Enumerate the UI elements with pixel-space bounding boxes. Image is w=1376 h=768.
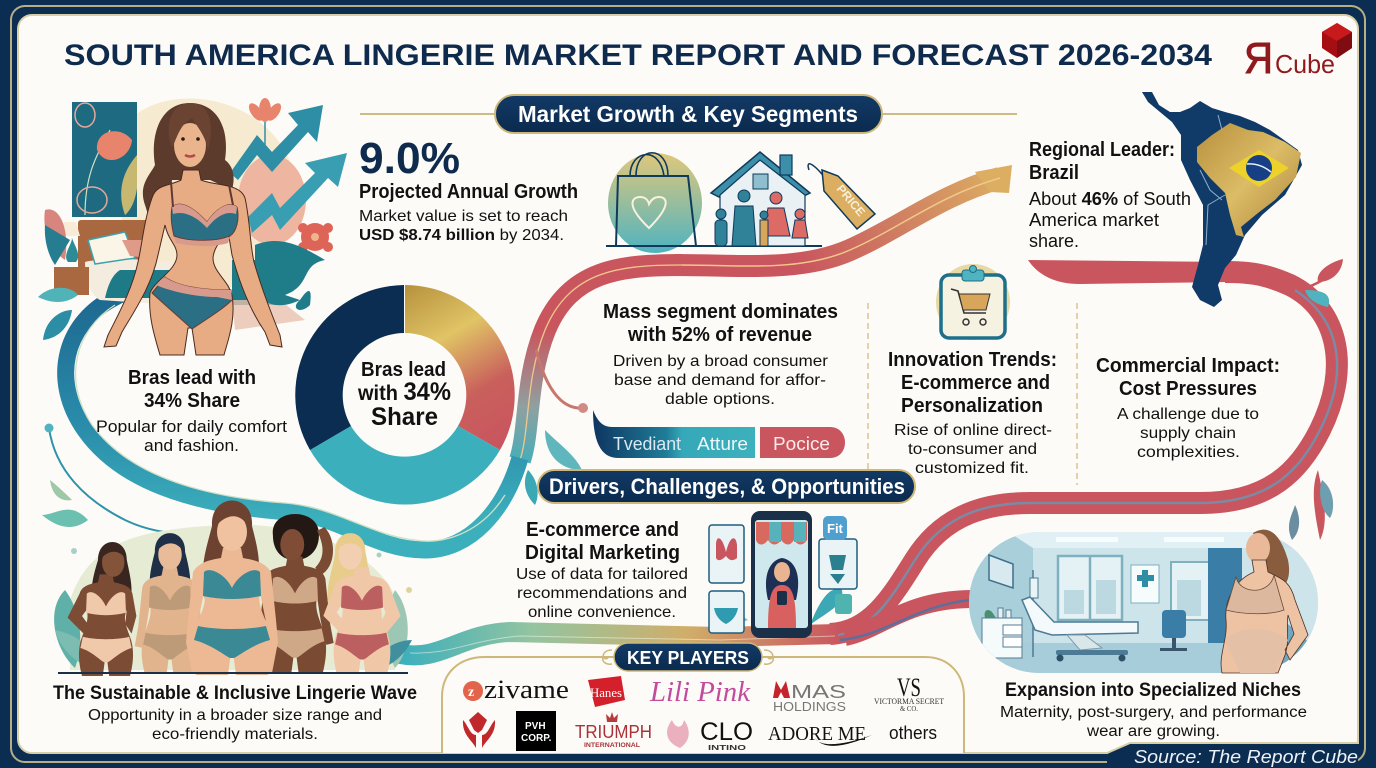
- stat: projected annual growth: Market value is set to reach: [359, 208, 568, 225]
- text block: innovation trends: E-commerce and: [901, 372, 1050, 394]
- text block: mass segment: base and demand for affor-: [614, 372, 826, 389]
- text block: regional leader: share.: [1029, 231, 1079, 251]
- stat: projected annual growth: USD $8.74 billion by 2034.: [359, 227, 564, 244]
- heading pill: drivers: Drivers, Challenges, & Opportunities: [549, 474, 905, 499]
- stat: projected annual growth: [359, 134, 578, 244]
- ribbon: red to teal around donut: [520, 265, 682, 460]
- logo: zivame: zivame: [484, 675, 569, 704]
- model: panties: [152, 277, 232, 329]
- logo: CLO Intino: [667, 718, 753, 752]
- source tab: [1000, 600, 1358, 768]
- icon: shopping bag: [608, 153, 702, 253]
- panel: key players: [442, 643, 964, 753]
- stat: projected annual growth: 9.0%: [359, 134, 460, 183]
- salmon shape: [238, 155, 306, 245]
- growth arrows: [230, 105, 323, 180]
- text block: innovation trends: to-consumer and: [908, 441, 1037, 458]
- logo: Hanes: Hanes: [590, 685, 622, 700]
- dividers: [868, 303, 1077, 485]
- ribbon: red rise to right side: [830, 260, 1337, 640]
- ribbon: teal loop left: [42, 283, 520, 550]
- text block: regional leader: About 46% of South: [1029, 189, 1191, 209]
- logo: PVH Corp: PVH: [525, 721, 546, 732]
- text block: specialized niches: Expansion into Specialized Niches: [1005, 680, 1301, 701]
- logo: Victoria's Secret: VICTORMA SECRET: [874, 697, 944, 706]
- logo: Victoria's Secret: & CO.: [900, 705, 918, 713]
- teal foliage: [255, 241, 325, 305]
- nightstand and lamp: [54, 267, 89, 295]
- donut centre label: [357, 359, 451, 431]
- text block: mass segment: dable options.: [665, 391, 775, 408]
- segment bar: [593, 410, 845, 458]
- text block: innovation trends: Personalization: [901, 395, 1043, 417]
- text block: e-commerce: recommendations and: [517, 585, 687, 602]
- logo: RCube: [1244, 23, 1352, 83]
- icon: phone shopping: [709, 511, 857, 638]
- logo: Triumph: TRIUMPH: [575, 722, 652, 742]
- text block: commercial impact: [1096, 355, 1280, 461]
- logo: MAS Holdings: HOLDINGS: [773, 699, 846, 714]
- Brazil flag badge: [1229, 150, 1289, 187]
- logo: PVH Corp: [516, 711, 556, 751]
- stat: projected annual growth: Projected Annual Growth: [359, 181, 578, 203]
- icon: clipboard with cart: [936, 264, 1010, 340]
- text block: bras lead: [96, 367, 287, 455]
- text block: e-commerce: E-commerce and: [526, 519, 679, 541]
- text block: mass segment: Driven by a broad consumer: [613, 353, 829, 370]
- logo: MAS Holdings: [773, 681, 846, 714]
- logo: Hanes: [588, 676, 625, 707]
- logo: RCube: Cube: [1275, 49, 1335, 79]
- heading pill: market growth: Market Growth & Key Segments: [518, 101, 858, 127]
- text block: bras lead: Bras lead with: [128, 367, 256, 389]
- side leaves: [38, 288, 78, 302]
- logo: MAS Holdings: MAS: [791, 682, 846, 702]
- model: bra: [171, 204, 238, 240]
- segment bar: Tvediant: [613, 434, 681, 454]
- logo: Victoria's Secret: VS: [897, 673, 921, 702]
- woman 2: [135, 533, 205, 674]
- model: body: [104, 170, 282, 355]
- source tab: Source: The Report Cube: [1134, 747, 1358, 767]
- text block: bras lead: and fashion.: [144, 437, 239, 455]
- text block: regional leader: America market: [1029, 210, 1159, 230]
- text block: sustainable and inclusive: [53, 683, 417, 743]
- text block: e-commerce: Digital Marketing: [525, 542, 680, 564]
- text block: innovation trends: [888, 349, 1057, 477]
- text block: mass segment: with 52% of revenue: [627, 324, 812, 346]
- label: others: others: [889, 723, 937, 743]
- illustration: lingerie model in bedroom: [38, 98, 347, 355]
- logo: Triumph: [575, 712, 652, 749]
- model: head: [174, 123, 206, 167]
- text block: bras lead: 34% Share: [144, 390, 240, 412]
- logo: CLO Intino: INTINO: [708, 745, 747, 752]
- leaves: right sprig: [1300, 259, 1343, 307]
- text block: specialized niches: Maternity, post-surgery, and performance: [1000, 704, 1307, 721]
- icon: price tag: [808, 164, 875, 229]
- text block: innovation trends: customized fit.: [915, 460, 1029, 477]
- donut centre label: Share: [371, 403, 438, 431]
- illustration: diverse women group: [54, 500, 412, 676]
- text block: commercial impact: Commercial Impact:: [1096, 355, 1280, 377]
- text block: sustainable and inclusive: The Sustainable & Inclusive Lingerie Wave: [53, 683, 417, 704]
- text block: commercial impact: complexities.: [1137, 444, 1240, 461]
- leaves: lower right sprig: [1289, 470, 1333, 540]
- coral flowers: [246, 98, 284, 123]
- model: hair back: [143, 103, 234, 222]
- wall art panel: [72, 102, 138, 217]
- woman 4: [256, 514, 334, 673]
- ribbon: lower flow teal gold red: [400, 632, 838, 655]
- woman 1: [68, 542, 136, 676]
- text block: regional leader: [1029, 139, 1191, 251]
- logo: RCube: Я: [1244, 34, 1273, 83]
- map: South America with Brazil highlighted: [1142, 92, 1302, 307]
- bed: [78, 220, 153, 280]
- logo: CLO Intino: CLO: [700, 718, 753, 746]
- product cards: [709, 516, 857, 633]
- logo: Lili Pink: Lili Pink: [649, 676, 751, 708]
- logo: Adore Me: ADORE ME: [768, 723, 866, 745]
- segment bar: Pocice: [773, 434, 830, 454]
- text block: commercial impact: Cost Pressures: [1119, 378, 1257, 400]
- text block: mass segment: Mass segment dominates: [603, 301, 838, 323]
- logo: zivame: z: [468, 685, 474, 700]
- background circle: [118, 98, 295, 300]
- text block: mass segment: [603, 301, 838, 408]
- heading pill: market growth: [360, 95, 1017, 133]
- text block: innovation trends: Rise of online direct-: [894, 422, 1052, 439]
- text block: specialized niches: wear are growing.: [1086, 723, 1220, 740]
- text block: innovation trends: Innovation Trends:: [888, 349, 1057, 371]
- icon: price tag: PRICE: [834, 182, 868, 219]
- logo: Victoria's Secret: [874, 673, 944, 713]
- text block: regional leader: Regional Leader:: [1029, 139, 1175, 161]
- logo: PVH Corp: CORP.: [521, 733, 552, 744]
- text block: sustainable and inclusive: Opportunity in a broader size range and: [88, 707, 382, 724]
- text block: e-commerce: online convenience.: [528, 604, 676, 621]
- woman 5: [323, 533, 401, 674]
- text block: e-commerce: [516, 519, 688, 621]
- segment bar: Atture: [697, 434, 748, 454]
- donut centre label: Bras lead: [361, 359, 446, 381]
- text block: commercial impact: A challenge due to: [1117, 406, 1259, 423]
- text block: bras lead: Popular for daily comfort: [96, 418, 287, 436]
- heading pill: KEY PLAYERS: [627, 648, 749, 668]
- ribbon: upper flow gold to red: [545, 165, 1012, 330]
- logo: Triumph: INTERNATIONAL: [584, 742, 640, 749]
- text block: e-commerce: Use of data for tailored: [516, 566, 688, 583]
- heading pill: [614, 643, 762, 671]
- stem with dot and teal leaves: [525, 350, 588, 505]
- icon: house with family: [606, 152, 822, 246]
- product cards: Fit: [827, 521, 844, 536]
- donut centre label: with 34%: [357, 378, 451, 406]
- illustration: hospital room with expecting woman: [969, 530, 1318, 673]
- woman 3: [186, 500, 278, 675]
- logo: red lotus: [463, 712, 495, 748]
- text block: sustainable and inclusive: eco-friendly materials.: [152, 726, 318, 743]
- text block: commercial impact: supply chain: [1140, 425, 1236, 442]
- flourishes: [603, 650, 612, 664]
- text block: specialized niches: [1000, 680, 1307, 740]
- expecting woman: [1221, 530, 1308, 673]
- text block: regional leader: Brazil: [1029, 162, 1079, 184]
- title: SOUTH AMERICA LINGERIE MARKET REPORT AND FORECAST 2026-2034: [64, 39, 1212, 72]
- donut chart: share by segment: [295, 285, 515, 505]
